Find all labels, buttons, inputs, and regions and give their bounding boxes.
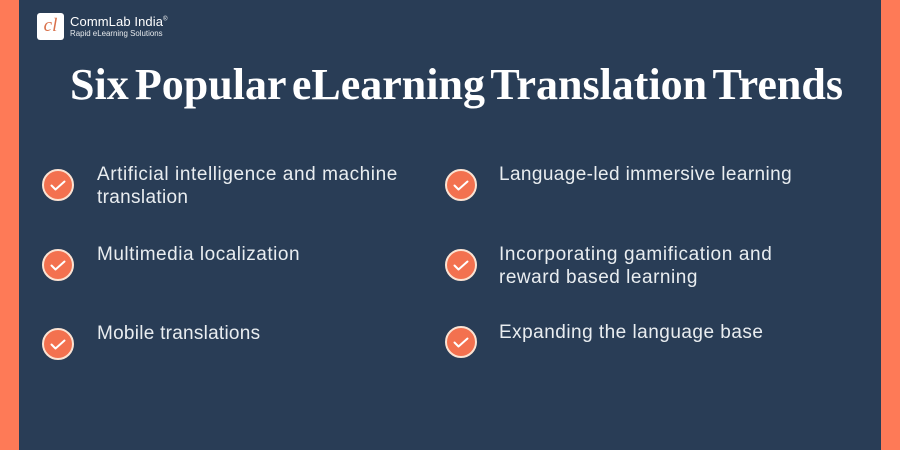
logo	[37, 13, 168, 40]
left column item 1 text: Artificial intelligence and machine	[97, 164, 398, 185]
right column item 1 text: Language-led immersive learning	[499, 164, 792, 185]
right column item 2 text: Incorporating gamification and	[499, 244, 772, 265]
left column item 1 text	[97, 164, 398, 208]
right column item 3 text: Expanding the language base	[499, 322, 763, 343]
right column item 2 icon: check	[445, 249, 477, 281]
left column item 1 text: translation	[97, 186, 188, 208]
left orange border	[0, 0, 19, 450]
left column item 2 text: Multimedia localization	[97, 244, 300, 265]
logo icon	[37, 13, 64, 40]
left column item 2 icon: check	[42, 249, 74, 281]
left column item 3 text: Mobile translations	[97, 323, 260, 344]
left column item 3 icon: check	[42, 328, 74, 360]
right column item 2 text: reward based learning	[499, 266, 698, 288]
right column item 3 icon: check	[445, 326, 477, 358]
title: Six Popular eLearning Translation Trends	[70, 60, 843, 109]
right column item 1 icon: check	[445, 169, 477, 201]
logo name: CommLab India®	[70, 14, 168, 29]
right column item 2 text	[499, 244, 772, 288]
logo icon: cl	[44, 15, 57, 36]
logo tagline: Rapid eLearning Solutions	[70, 29, 163, 38]
right orange border	[881, 0, 900, 450]
left column item 1 icon: check	[42, 169, 74, 201]
